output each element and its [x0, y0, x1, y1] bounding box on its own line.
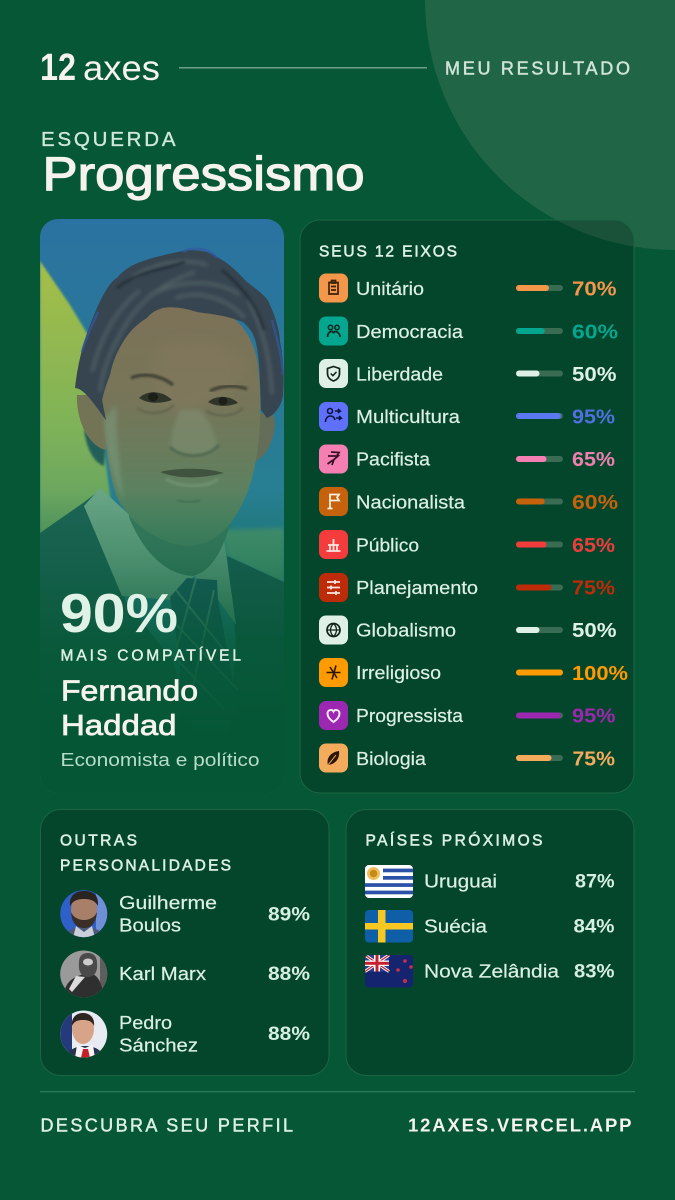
- country: Suécia: [365, 910, 614, 942]
- axis: Liberdade: 50%: [572, 363, 616, 386]
- person: Pedro Sánchez: 88%: [268, 1023, 310, 1045]
- axis: Pacifista: 65%: [572, 448, 615, 471]
- axis: Irreligioso: Irreligioso: [356, 662, 441, 683]
- person: Karl Marx: [60, 950, 310, 998]
- title: Progressismo: [42, 147, 364, 200]
- axis: Progressista: 95%: [572, 704, 616, 728]
- decorative circle: [425, 0, 675, 250]
- person: Guilherme Boulos: Guilherme: [119, 892, 217, 913]
- eyebrow: ESQUERDA: [41, 128, 176, 151]
- axis: Globalismo: Globalismo: [356, 620, 456, 640]
- axis: Progressista: [319, 701, 616, 730]
- countries heading: PAÍSES PRÓXIMOS: [366, 833, 542, 850]
- axis: Liberdade: Liberdade: [356, 364, 443, 384]
- logo: axes: [83, 49, 160, 88]
- country: Suécia: Suécia: [424, 916, 488, 937]
- axes heading: SEUS 12 EIXOS: [319, 244, 457, 261]
- axis: Unitário: [319, 274, 616, 302]
- person: Pedro Sánchez: Sánchez: [119, 1035, 198, 1056]
- country: Uruguai: [365, 865, 614, 898]
- axis: Multicultura: [319, 402, 615, 431]
- axis: Multicultura: Multicultura: [356, 406, 461, 427]
- person: Karl Marx: 88%: [268, 963, 310, 985]
- person name: [61, 676, 198, 742]
- country: Suécia: 84%: [574, 916, 614, 938]
- panel: axes: [300, 220, 634, 793]
- logo: [40, 47, 160, 89]
- axis: Progressista: Progressista: [356, 705, 464, 726]
- axis: Planejamento: 75%: [572, 576, 615, 600]
- axis: Multicultura: 95%: [572, 406, 615, 428]
- person: Pedro Sánchez: [60, 1010, 310, 1058]
- fade overlay: [40, 490, 284, 740]
- person: Karl Marx: Karl Marx: [119, 963, 207, 984]
- axis: Irreligioso: 100%: [572, 662, 628, 685]
- axis: Planejamento: [319, 573, 615, 602]
- footer url: 12AXES.VERCEL.APP: [408, 1115, 632, 1136]
- person: Guilherme Boulos: Boulos: [119, 915, 181, 936]
- person: Pedro Sánchez: Pedro: [119, 1012, 172, 1033]
- axis: Liberdade: [319, 359, 616, 388]
- person name: Fernando: [61, 676, 198, 708]
- footer call to action: DESCUBRA SEU PERFIL: [40, 1116, 293, 1136]
- axis: Nacionalista: [319, 487, 618, 516]
- axis: Democracia: 60%: [572, 320, 618, 344]
- axis: Planejamento: Planejamento: [356, 577, 478, 598]
- country: Nova Zelândia: [365, 955, 614, 988]
- personalities heading: [60, 833, 231, 875]
- person: Guilherme Boulos: [60, 890, 310, 938]
- logo: 12: [40, 47, 76, 89]
- axis: Nacionalista: 60%: [572, 491, 618, 514]
- portrait illustration: [40, 219, 284, 800]
- country: Nova Zelândia: 83%: [574, 960, 614, 982]
- header label: MEU RESULTADO: [445, 58, 630, 78]
- person role: Economista e político: [60, 749, 260, 770]
- personalities heading: PERSONALIDADES: [60, 858, 231, 875]
- compatibility value: 90%: [60, 582, 178, 644]
- panel: other personalities: [40, 810, 329, 1076]
- axis: Globalismo: 50%: [572, 619, 616, 642]
- person name: Haddad: [61, 710, 176, 742]
- axis: Democracia: Democracia: [356, 321, 464, 342]
- axis: Público: [319, 530, 615, 559]
- axis: Globalismo: [319, 616, 616, 644]
- personalities heading: OUTRAS: [60, 833, 137, 850]
- axis: Pacifista: [319, 444, 615, 474]
- axis: Público: Público: [356, 534, 419, 556]
- panel: nearby countries: [346, 810, 634, 1076]
- panel: portrait card: [40, 219, 284, 800]
- country: Nova Zelândia: Nova Zelândia: [424, 960, 560, 981]
- axis: Biologia: 75%: [572, 748, 615, 770]
- axis: Unitário: 70%: [572, 278, 616, 300]
- person: Guilherme Boulos: 89%: [268, 904, 310, 926]
- axis: Irreligioso: [319, 658, 628, 687]
- axis: Unitário: Unitário: [356, 278, 424, 299]
- axis: Pacifista: Pacifista: [356, 448, 431, 470]
- axis: Biologia: [319, 744, 615, 772]
- axis: Democracia: [319, 316, 618, 346]
- country: Uruguai: 87%: [575, 871, 614, 893]
- axis: Biologia: Biologia: [356, 748, 427, 769]
- compatibility label: MAIS COMPATÍVEL: [60, 648, 241, 665]
- axis: Nacionalista: Nacionalista: [356, 492, 466, 512]
- axis: Público: 65%: [572, 534, 615, 557]
- country: Uruguai: Uruguai: [424, 871, 497, 892]
